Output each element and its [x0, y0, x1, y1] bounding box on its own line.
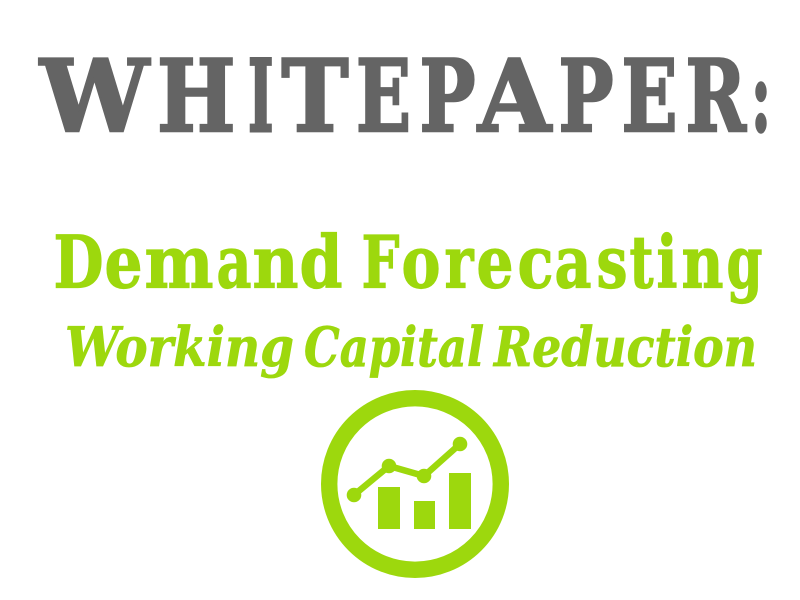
subheading: Working Capital Reduction: Working	[65, 315, 294, 379]
heading: Demand Forecasting: F	[362, 220, 400, 304]
title: WHITEPAPER: H	[157, 39, 236, 155]
title: WHITEPAPER: I	[248, 39, 274, 155]
icon: chart in circle	[329, 398, 501, 570]
heading: Demand Forecasting: c	[518, 220, 554, 304]
heading: Demand Forecasting: D	[54, 220, 104, 304]
heading: Demand Forecasting: n	[682, 220, 724, 304]
title: WHITEPAPER: W	[39, 39, 151, 155]
title: WHITEPAPER: E	[356, 39, 411, 155]
heading: Demand Forecasting: s	[596, 220, 628, 304]
icon trend line	[347, 437, 467, 502]
title: WHITEPAPER: P	[420, 39, 476, 155]
subheading: Working Capital Reduction: Reduction	[492, 315, 757, 379]
heading: Demand Forecasting: t	[630, 220, 654, 304]
heading: Demand Forecasting: d	[300, 220, 342, 304]
heading: Demand Forecasting: a	[216, 220, 252, 304]
heading: Demand Forecasting: a	[554, 220, 592, 304]
heading: Demand Forecasting: m	[144, 220, 214, 304]
heading: Demand Forecasting: e	[104, 220, 142, 304]
title: WHITEPAPER: A	[477, 39, 552, 155]
subheading: Working Capital Reduction: Capital	[304, 315, 484, 379]
heading: Demand Forecasting: n	[252, 220, 298, 304]
heading: Demand Forecasting: i	[656, 220, 678, 304]
heading: Demand Forecasting: e	[476, 220, 514, 304]
heading: Demand Forecasting: o	[402, 220, 440, 304]
title: WHITEPAPER: P	[558, 39, 614, 155]
title: WHITEPAPER: :	[751, 39, 771, 155]
title: WHITEPAPER: R	[686, 39, 747, 155]
title: WHITEPAPER: T	[282, 39, 348, 155]
heading: Demand Forecasting: g	[726, 220, 762, 304]
icon bars	[378, 473, 471, 529]
heading: Demand Forecasting: r	[444, 220, 474, 304]
icon ring	[329, 398, 501, 570]
title: WHITEPAPER: E	[622, 39, 678, 155]
